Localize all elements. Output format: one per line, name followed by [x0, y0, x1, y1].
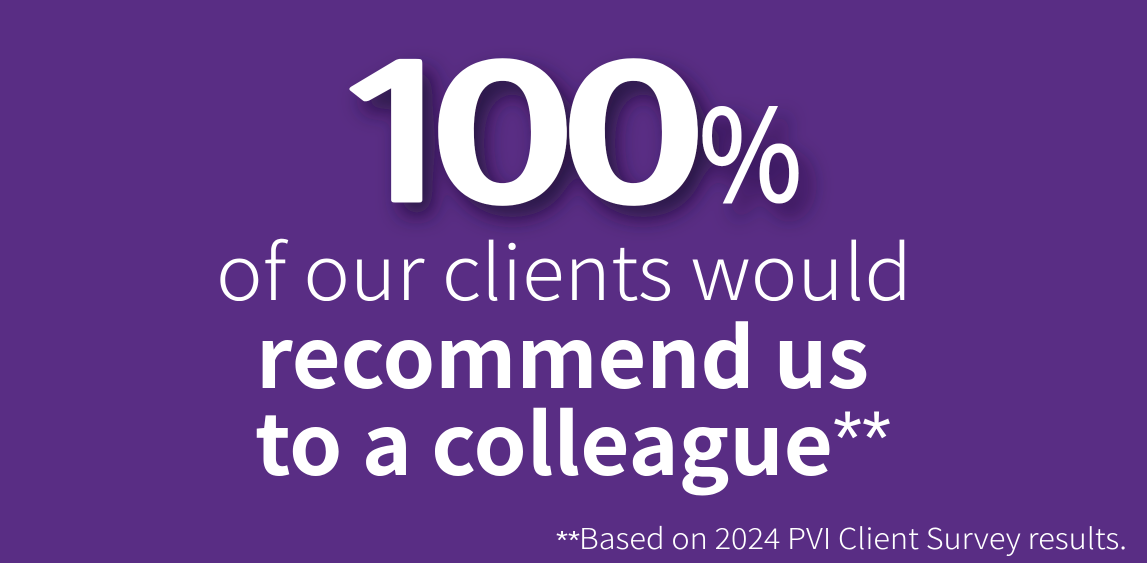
footnote asterisks: ** [556, 525, 580, 555]
percent sign: % [699, 56, 802, 238]
footnote text: Based on 2024 PVI Client Survey results. [579, 516, 1127, 558]
line: recommend us: recommend us [256, 292, 869, 413]
footnote [556, 516, 1127, 558]
big statistic: 100% [312, 0, 802, 260]
line: of our clients would: of our clients would [216, 212, 912, 322]
asterisks: ** [833, 396, 891, 481]
digit 1: 1 [312, 43, 488, 230]
line: to a colleague: to a colleague [255, 379, 833, 500]
